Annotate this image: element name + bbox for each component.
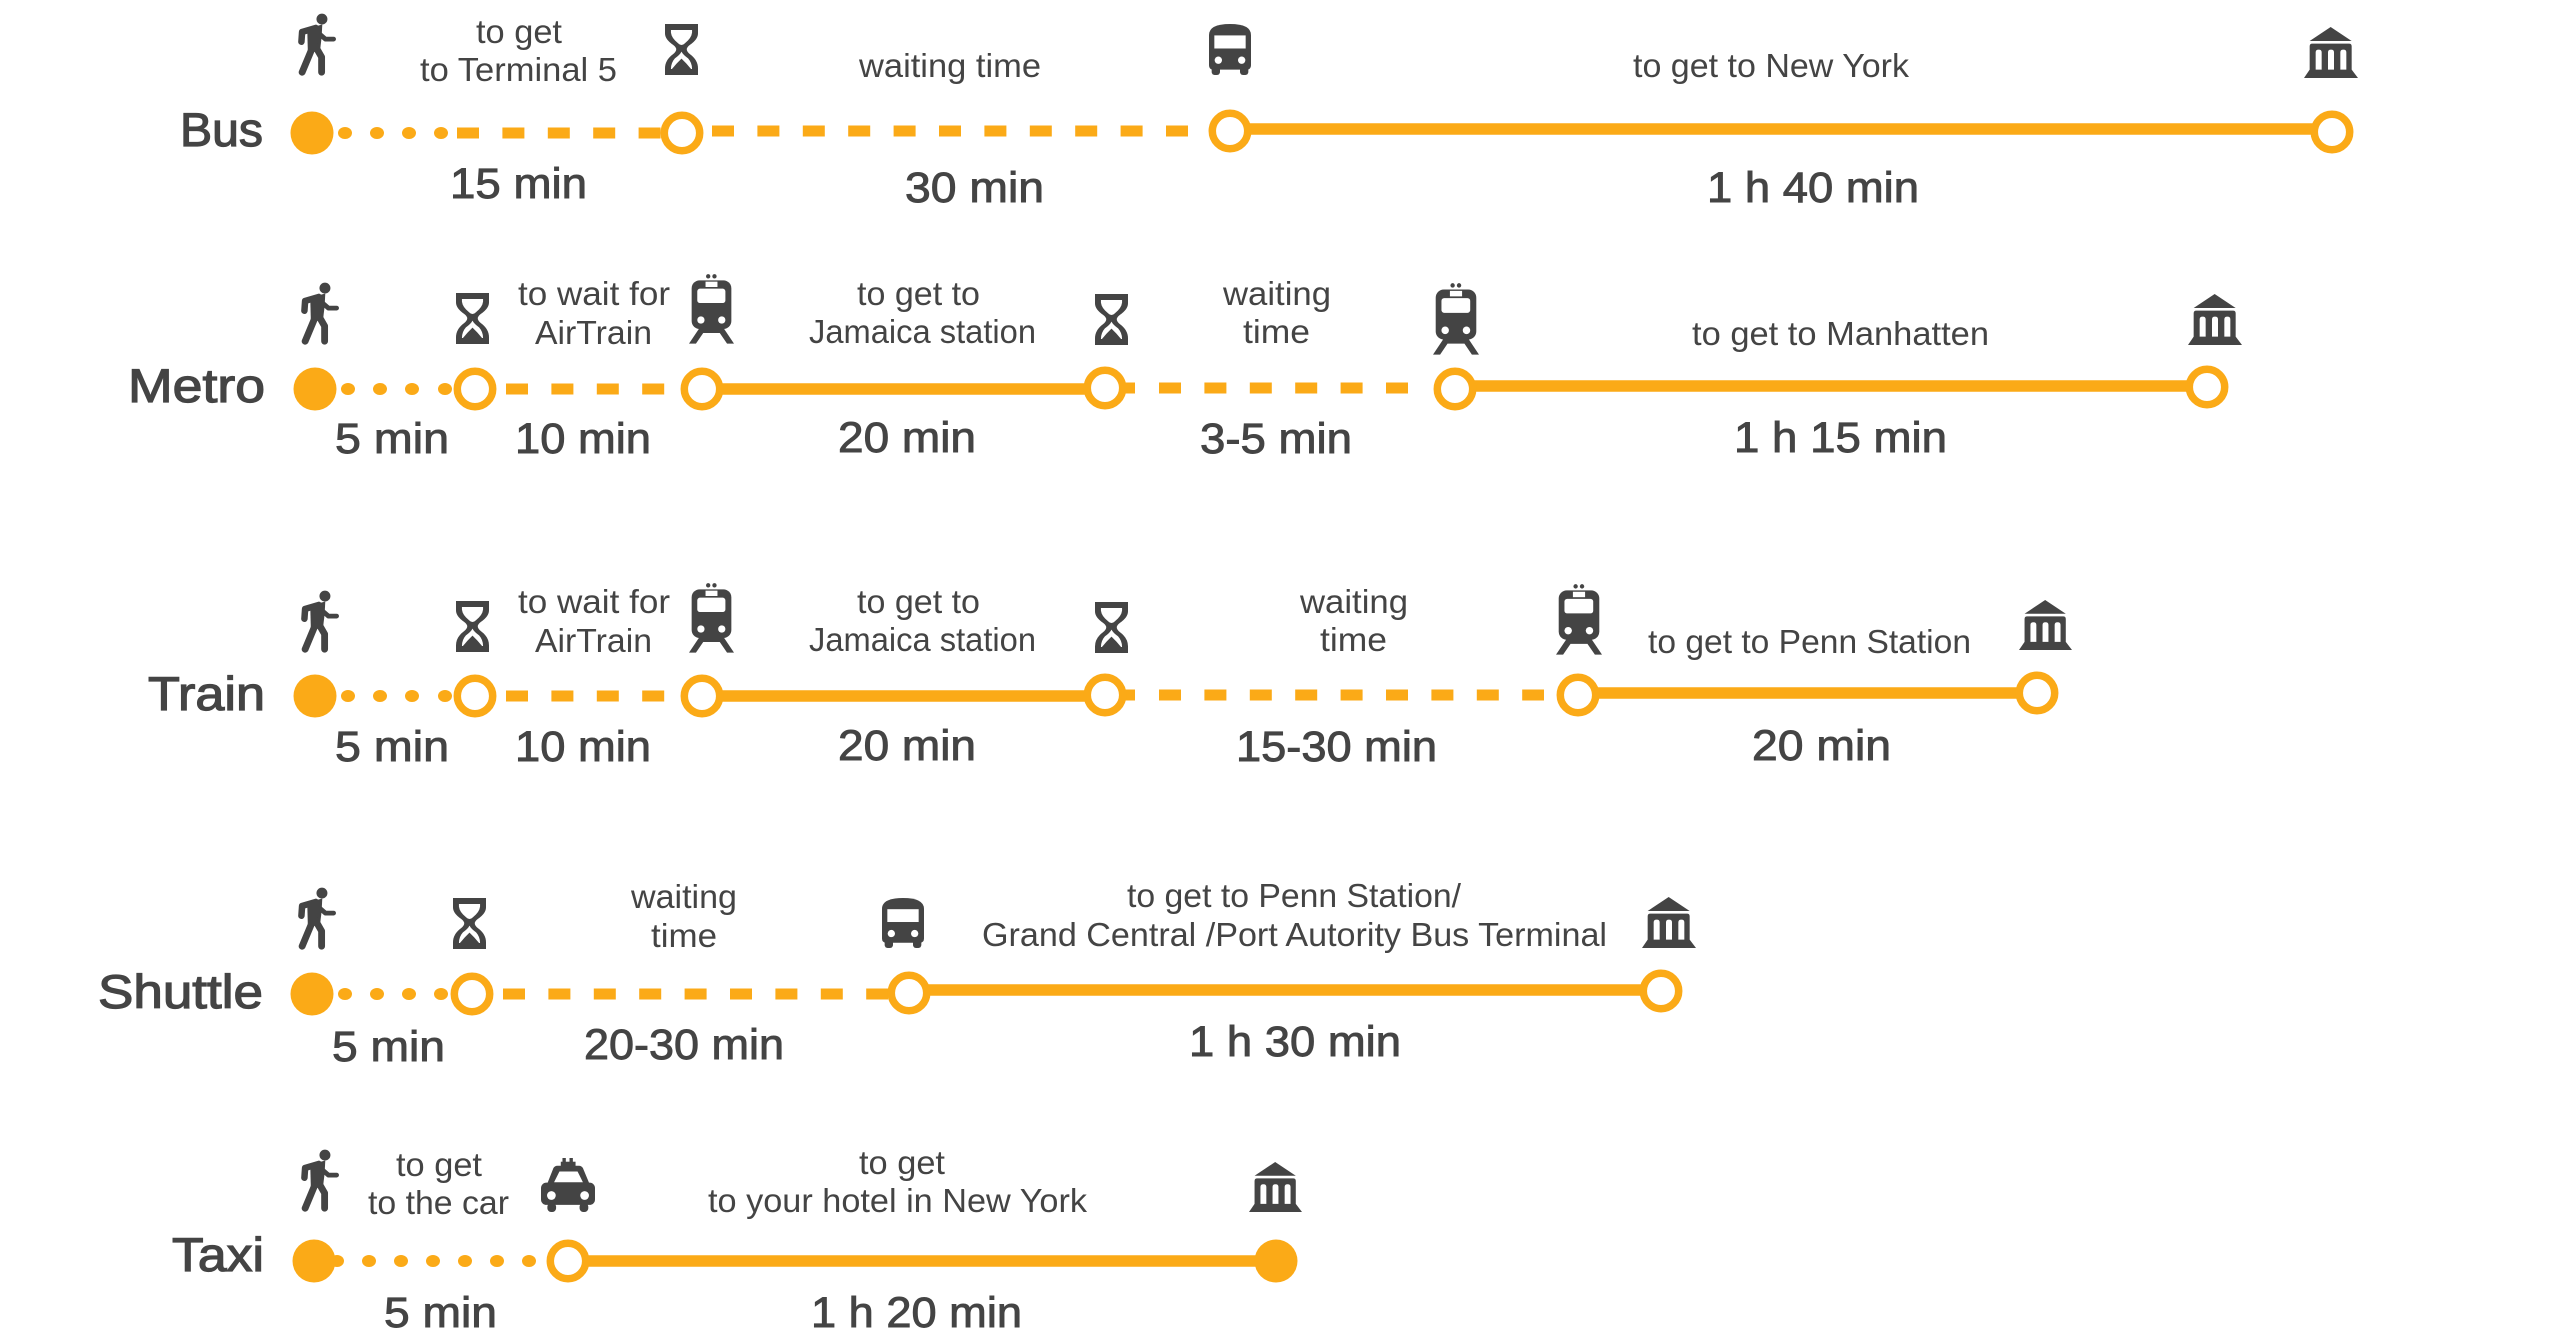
durations: 5 min	[335, 415, 449, 463]
panel: Bus route	[180, 13, 2358, 212]
durations: 15 min	[450, 160, 587, 208]
text: to wait for AirTrain: AirTrain	[535, 622, 652, 659]
text: to get to Manhatten: to get to Manhatten	[1692, 315, 1989, 352]
text: to get to the car: to the car	[368, 1184, 509, 1221]
durations: 5 min	[332, 1023, 445, 1071]
text: to get to Jamaica station	[809, 583, 1036, 658]
panel: Metro route	[128, 274, 2242, 463]
text: to get to Jamaica station: Jamaica station	[809, 313, 1036, 350]
durations: 30 min	[905, 164, 1044, 212]
durations	[384, 1289, 1022, 1333]
icon: destination building	[2188, 294, 2242, 345]
durations: 1 h 30 min	[1189, 1018, 1401, 1066]
icon: AirTrain	[689, 274, 734, 344]
durations: 5 min	[335, 723, 449, 771]
icon: hourglass	[1095, 602, 1128, 653]
icon: hourglass	[456, 601, 489, 652]
text: to get to Penn Station: to get to Penn Station	[1648, 623, 1971, 660]
text: waiting time	[630, 878, 737, 954]
text: waiting time: waiting time	[858, 47, 1041, 84]
durations	[335, 414, 1947, 463]
route line	[290, 972, 1679, 1016]
icon: shuttle bus	[882, 898, 924, 948]
icon: destination building	[1249, 1162, 1302, 1212]
text: to wait for AirTrain: to wait for	[518, 583, 670, 620]
icon: destination building	[2304, 27, 2358, 78]
route line	[294, 368, 2225, 410]
icon: walking person	[301, 14, 334, 72]
panel: Train route	[148, 583, 2072, 771]
text: to get to your hotel in New York: to get	[859, 1144, 945, 1181]
icon: train	[1556, 584, 1602, 655]
durations	[335, 722, 1891, 771]
text: to get to your hotel in New York: to your hotel in New York	[708, 1182, 1088, 1219]
text: waiting time: time	[651, 917, 717, 954]
text: waiting time	[1299, 583, 1408, 658]
icon: hourglass	[456, 293, 489, 344]
icon: train	[1433, 283, 1479, 355]
icon: walking person	[301, 888, 334, 946]
durations: 15-30 min	[1236, 723, 1437, 771]
durations: 1 h 15 min	[1734, 414, 1947, 462]
text: to get to New York: to get to New York	[1633, 47, 1910, 84]
text: to wait for AirTrain	[518, 275, 670, 351]
text: to get to your hotel in New York	[708, 1144, 1088, 1219]
durations: 10 min	[515, 415, 651, 463]
text: to get to the car: to get	[396, 1146, 482, 1183]
text: waiting time: waiting	[630, 878, 737, 915]
label: Metro: Metro	[128, 359, 265, 412]
icon: walking person	[304, 283, 337, 341]
text: waiting time: waiting	[1299, 583, 1408, 620]
route line	[292, 1240, 1298, 1282]
text: to wait for AirTrain	[518, 583, 670, 659]
text: waiting time	[1222, 275, 1331, 350]
icon: AirTrain	[689, 583, 734, 653]
text: waiting time: time	[1320, 621, 1387, 658]
text: to get to Terminal 5: to get	[476, 13, 562, 50]
icon: bus	[1209, 24, 1251, 75]
text: to get to Jamaica station: to get to	[857, 583, 980, 620]
text: to wait for AirTrain: to wait for	[518, 275, 670, 312]
route line	[294, 674, 2055, 718]
icon: walking person	[304, 591, 337, 649]
text: to get to Jamaica station: Jamaica station	[809, 621, 1036, 658]
icon: destination building	[1642, 897, 1696, 948]
icon: destination building	[2019, 600, 2072, 650]
icon: hourglass	[453, 898, 486, 949]
durations: 1 h 40 min	[1707, 164, 1919, 212]
text: to get to Terminal 5	[420, 13, 617, 88]
text: to get to the car	[368, 1146, 509, 1221]
icon: hourglass	[1095, 294, 1128, 345]
icon: taxi	[541, 1158, 595, 1212]
label: Train: Train	[148, 667, 265, 720]
durations: 20 min	[838, 722, 976, 770]
icon: hourglass	[665, 24, 698, 75]
panel: Shuttle route	[98, 877, 1696, 1071]
panel: Taxi route	[172, 1144, 1302, 1333]
text: to get to Penn Station / Grand Central / Port Autority Bus Terminal: to get to Penn Station/	[1127, 877, 1462, 914]
durations	[450, 160, 1919, 212]
durations: 20-30 min	[584, 1021, 784, 1069]
icon: walking person	[304, 1150, 337, 1208]
durations: 3-5 min	[1200, 415, 1352, 463]
route line	[290, 112, 2350, 154]
text: waiting time: time	[1243, 313, 1310, 350]
text: waiting time: waiting	[1222, 275, 1331, 312]
durations: 20 min	[838, 414, 976, 462]
text: to get to Terminal 5: to Terminal 5	[420, 51, 617, 88]
label: Taxi: Taxi	[172, 1228, 264, 1281]
durations: 20 min	[1752, 722, 1891, 770]
label: Bus: Bus	[180, 103, 263, 156]
text: to wait for AirTrain: AirTrain	[535, 314, 652, 351]
durations	[332, 1018, 1401, 1071]
text: to get to Penn Station / Grand Central / Port Autority Bus Terminal: Grand Central /Port Autority Bus Terminal	[982, 916, 1607, 953]
text: to get to Penn Station / Grand Central / Port Autority Bus Terminal	[982, 877, 1607, 953]
text: to get to Jamaica station: to get to	[857, 275, 980, 312]
label: Shuttle: Shuttle	[98, 965, 263, 1018]
text: to get to Jamaica station	[809, 275, 1036, 350]
durations: 10 min	[515, 723, 651, 771]
